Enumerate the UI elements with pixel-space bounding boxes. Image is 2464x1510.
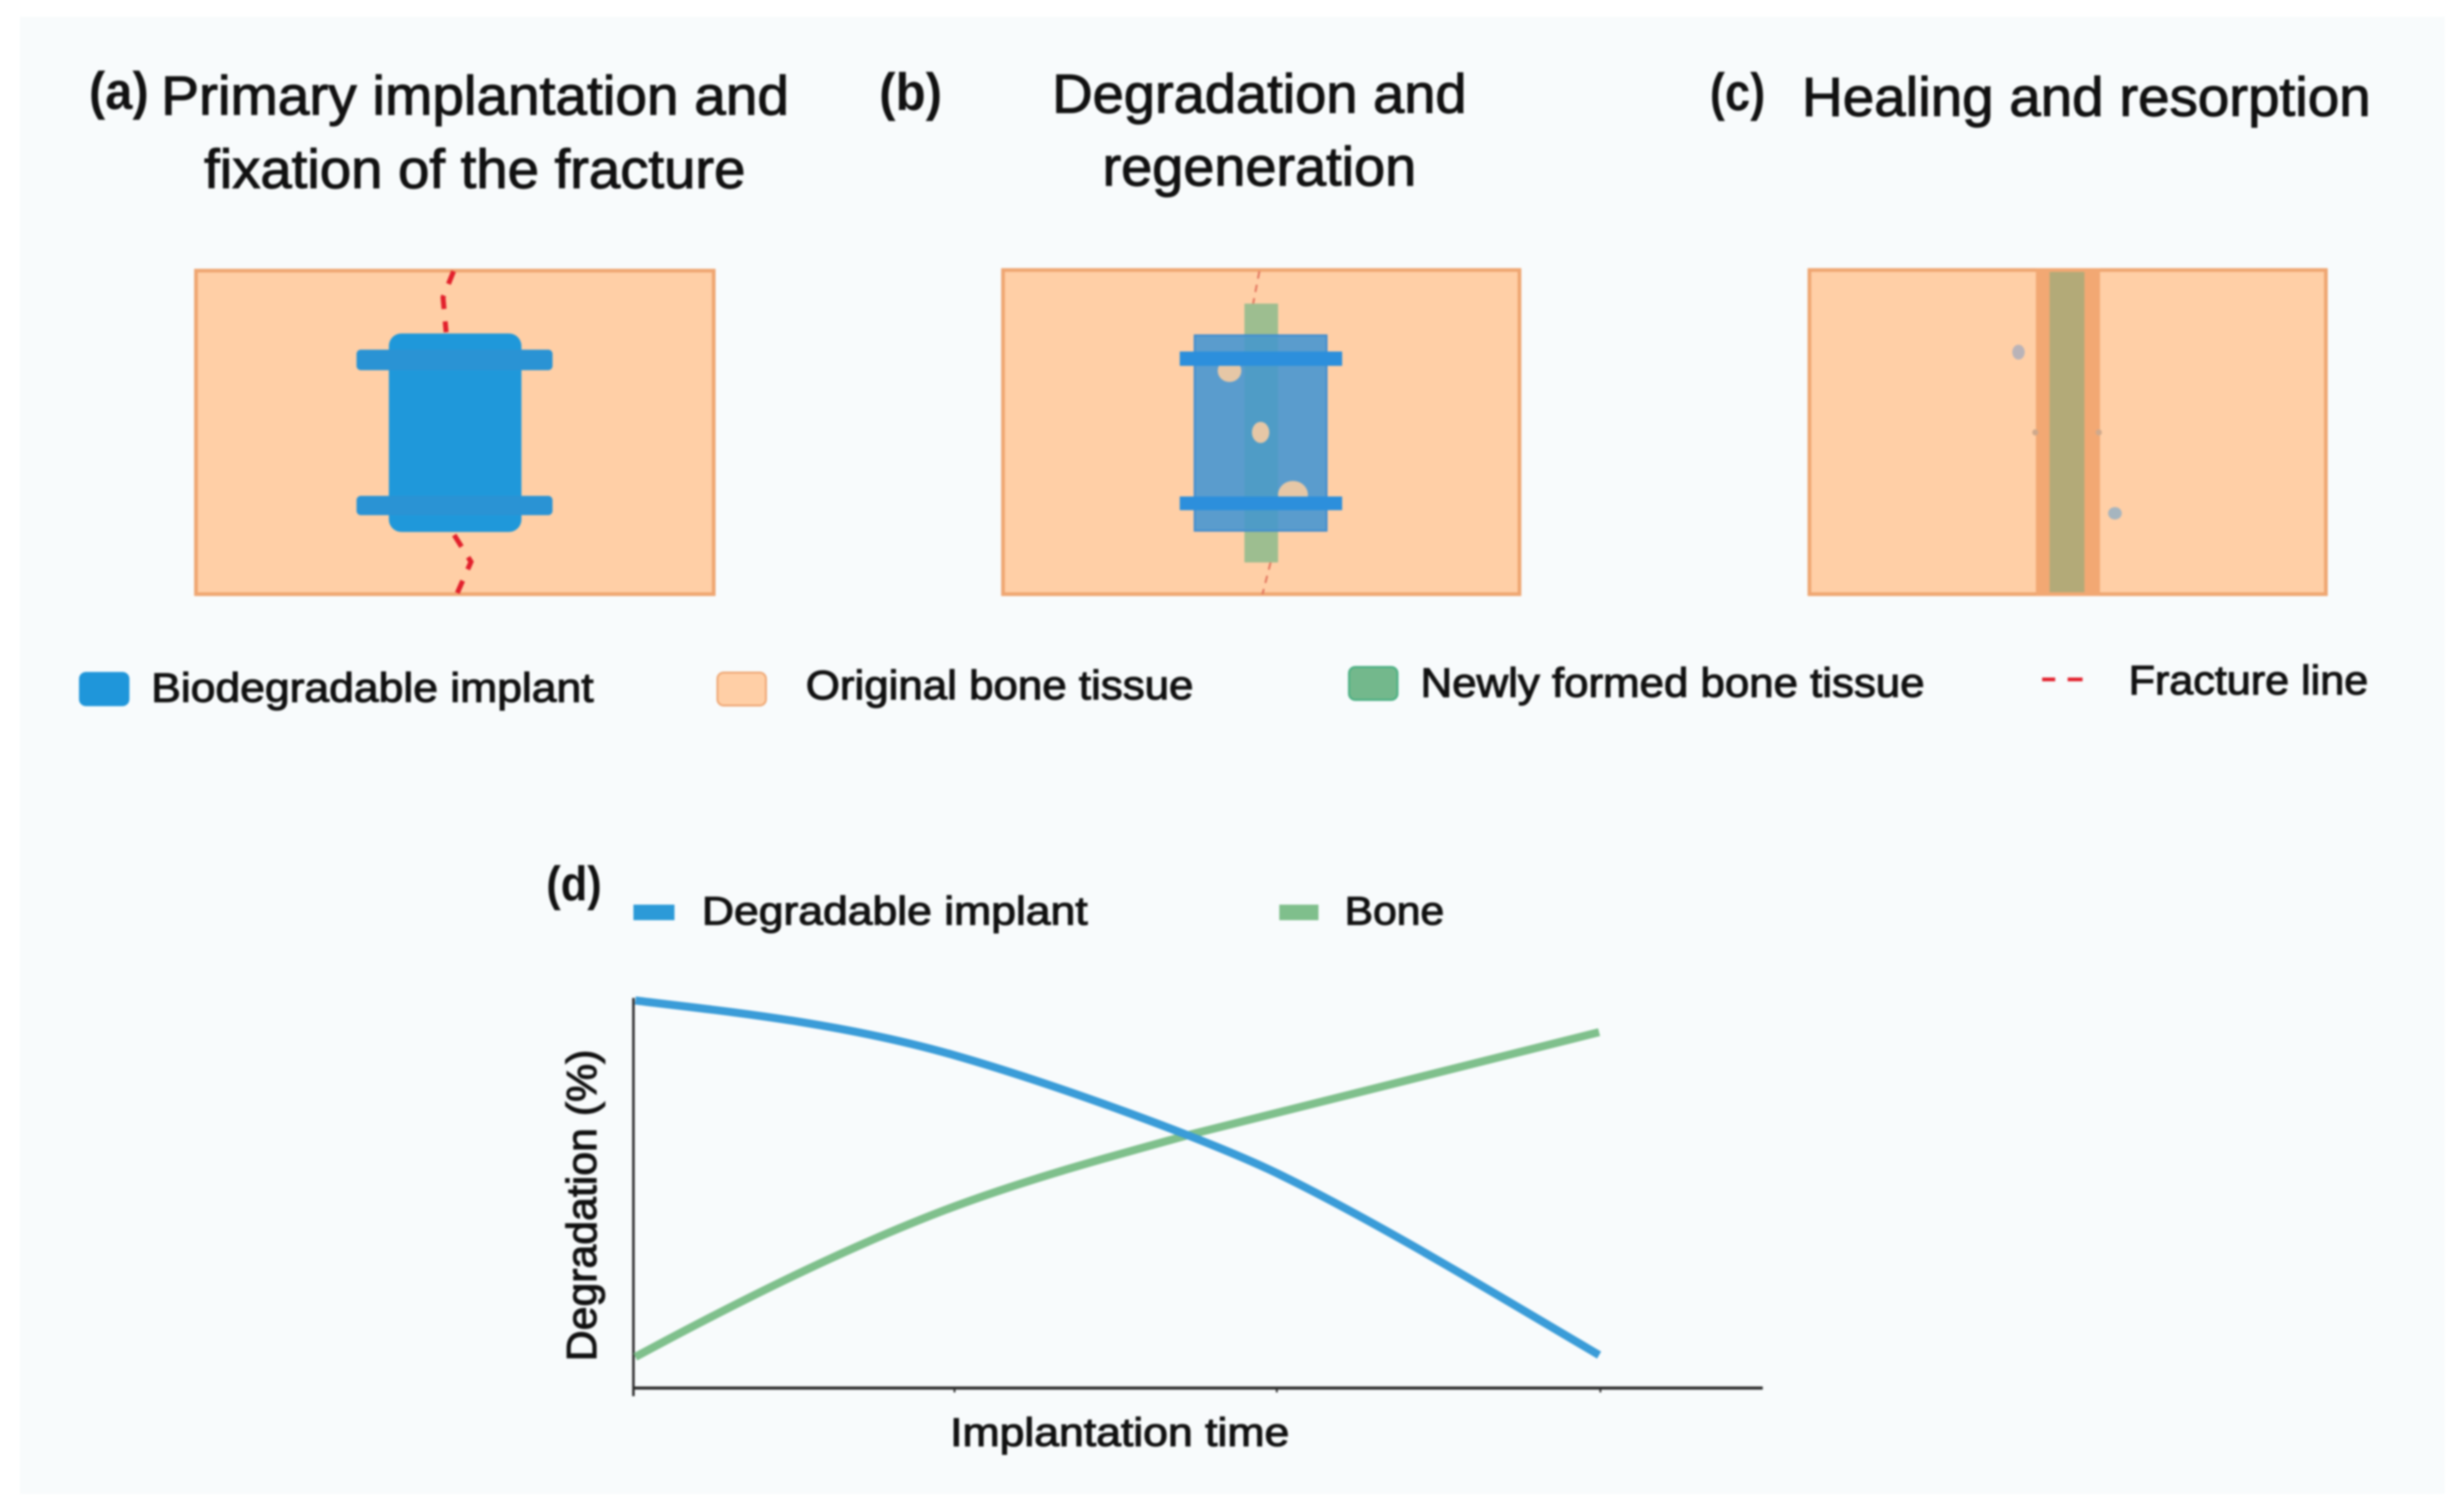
chart legend: bone [1279,888,1444,933]
panel c: healing and resorption [1710,63,2371,596]
label (c): (c) [1710,63,1765,121]
heading c: Healing and resorption [1802,66,2371,128]
heading b: regeneration [1103,136,1416,197]
heading a [161,65,789,200]
bone block a [196,271,714,594]
y axis title: Degradation (%) [558,1050,605,1361]
panel d: degradation chart [546,856,1763,1455]
legend: biodegradable implant: Biodegradable implant [151,664,594,711]
axes [632,998,1763,1396]
panel a: primary implantation [89,62,789,594]
fracture line b [1253,271,1271,594]
resorption pits [1218,360,1308,508]
label (d): (d) [546,856,602,911]
legend: newly formed bone tissue: Newly formed bone tissue [1421,659,1925,706]
legend: original bone tissue: Original bone tissue [806,662,1193,708]
bone block c [1809,270,2326,594]
heading a: fixation of the fracture [204,138,745,200]
label (a): (a) [89,62,149,120]
bone curve [635,1032,1599,1357]
new bone strip b [1244,304,1278,562]
panel b: degradation and regeneration [879,63,1519,594]
legend: fracture line: Fracture line [2129,657,2368,703]
bone block b [1003,270,1519,594]
healed band c [2036,268,2100,596]
implant a [357,333,553,532]
fracture line a [443,271,471,593]
x axis title: Implantation time [950,1410,1289,1455]
degrading implant b [1180,335,1342,531]
chart legend: bone: Bone [1345,888,1444,933]
heading b: Degradation and [1052,63,1467,124]
heading a: Primary implantation and [161,65,789,126]
chart legend: degradable implant: Degradable implant [702,888,1088,933]
degradable implant curve [635,1000,1599,1355]
residual particles c [2012,345,2122,520]
label (b): (b) [879,63,942,121]
heading b [1052,63,1467,197]
legend row [79,657,2368,711]
